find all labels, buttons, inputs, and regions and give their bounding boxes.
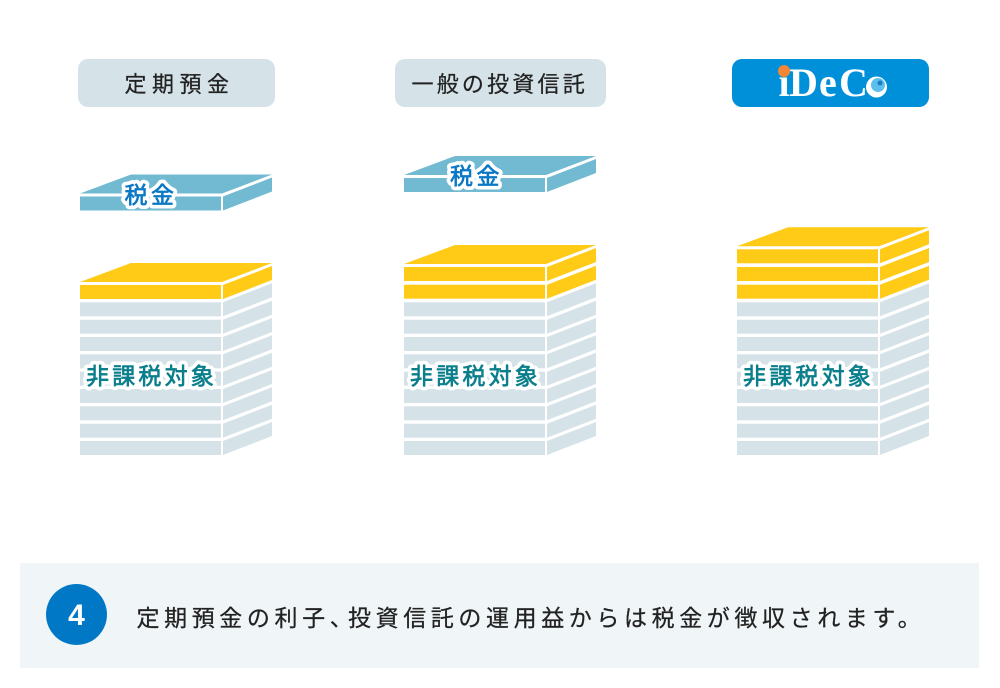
- label: 非課税対象: 非課税対象: [743, 363, 874, 389]
- label: iDeCo logo: iDeC: [778, 60, 868, 105]
- non-taxable stack: [404, 283, 596, 455]
- label: 非課税対象: 非課税対象: [410, 363, 541, 389]
- note text: 投資信託の運用益からは税金が徴収されます。: [348, 605, 925, 631]
- tax slab: [80, 174, 272, 210]
- label: 一般の投資信託: 一般の投資信託: [412, 72, 588, 97]
- label: 非課税対象: 非課税対象: [410, 363, 541, 389]
- column: 定期預金: [78, 59, 275, 455]
- badge: number 4: 4: [68, 599, 85, 632]
- taxable yellow layers: [737, 227, 929, 299]
- label: 非課税対象: 非課税対象: [743, 363, 874, 389]
- non-taxable stack: [737, 283, 929, 455]
- column: iDeCo: [732, 59, 929, 455]
- label: iDeCo logo: [732, 59, 929, 107]
- label: 非課税対象: 非課税対象: [86, 363, 217, 389]
- label: 定期預金: [78, 59, 275, 107]
- label: 一般の投資信託: [395, 59, 606, 107]
- label: 定期預金: 定期預金: [124, 72, 235, 97]
- column: 一般の投資信託: [395, 59, 606, 455]
- note text: 定期預金の利子、: [136, 605, 357, 631]
- badge: number 4: [46, 584, 107, 645]
- taxable yellow layer: [80, 263, 272, 299]
- label: 税金: 税金: [450, 163, 503, 189]
- label: 非課税対象: 非課税対象: [86, 363, 217, 389]
- non-taxable stack: [80, 283, 272, 455]
- label: 税金: 税金: [124, 182, 178, 208]
- tax slab: [404, 156, 596, 192]
- label: 税金: 税金: [450, 163, 503, 189]
- taxable yellow layers: [404, 245, 596, 299]
- label: 税金: 税金: [124, 182, 178, 208]
- panel: explanation note: [20, 563, 979, 668]
